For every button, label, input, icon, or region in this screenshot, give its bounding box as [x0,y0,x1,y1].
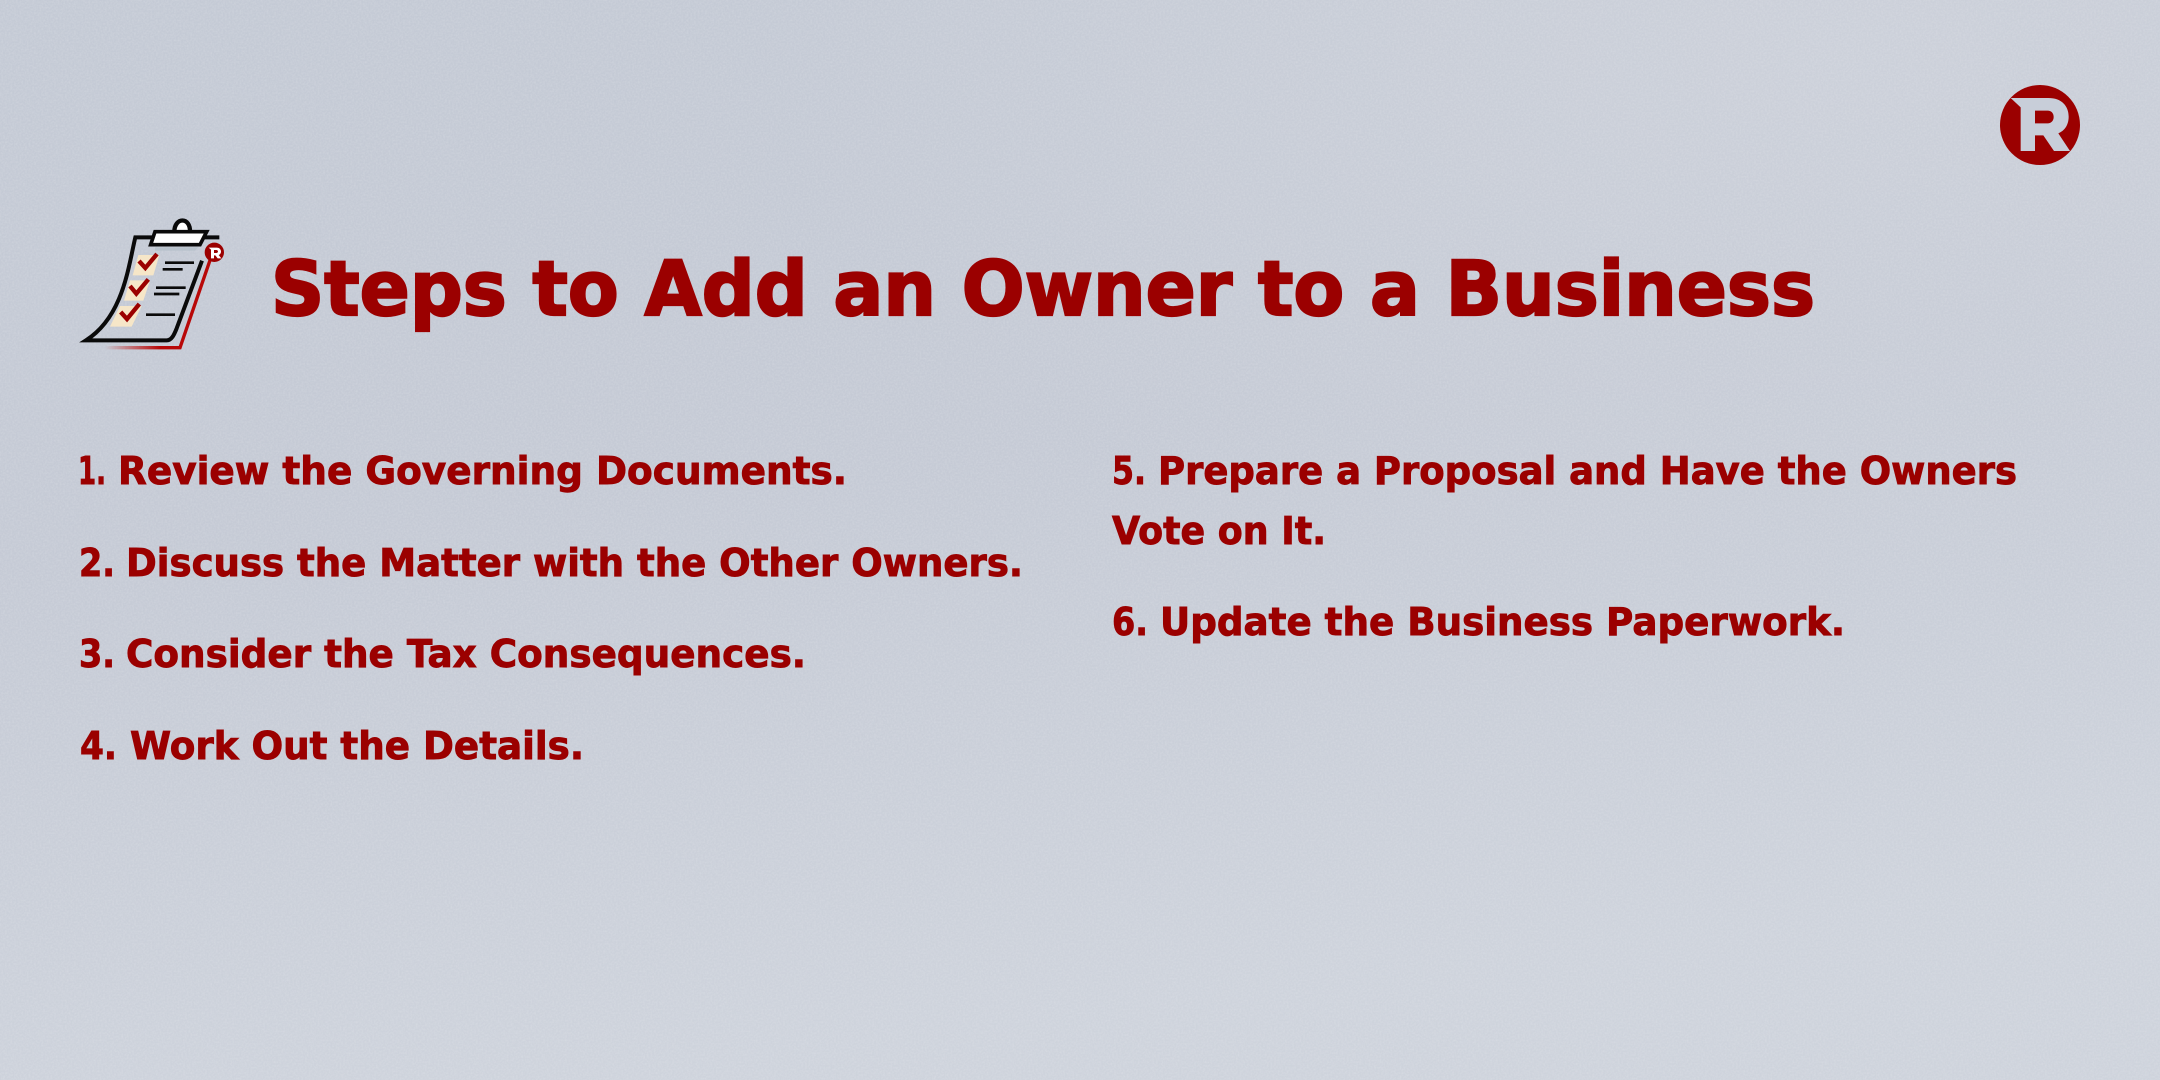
clipboard clip [151,220,207,251]
step 2: 2. [79,541,115,585]
step 5: Vote on It. [1112,509,1326,553]
step 4: Work Out the Details. [130,724,584,768]
step 5: 5. [1112,449,1146,493]
step 2: Discuss the Matter with the Other Owners. [126,541,1023,585]
registered badge [205,243,224,262]
red page shadow [105,258,211,348]
title: Steps to Add an Owner to a Business [271,244,1815,333]
step 5: Prepare a Proposal and Have the Owners [1158,449,2017,493]
step 4: 4. [80,724,117,768]
step 3: Consider the Tax Consequences. [126,632,806,676]
step 6: Update the Business Paperwork. [1160,600,1845,644]
logo: R badge [2000,85,2080,165]
icon: clipboard checklist [86,220,224,348]
clipboard paper outline [86,237,219,340]
check item 3 [110,304,175,327]
step 3: 3. [79,632,115,676]
step 6: 6. [1112,600,1148,644]
step 1: 1. [78,449,106,493]
step 1: Review the Governing Documents. [118,449,847,493]
check item 1 [133,254,194,275]
check item 2 [124,279,186,301]
step 5 [1112,449,2017,553]
